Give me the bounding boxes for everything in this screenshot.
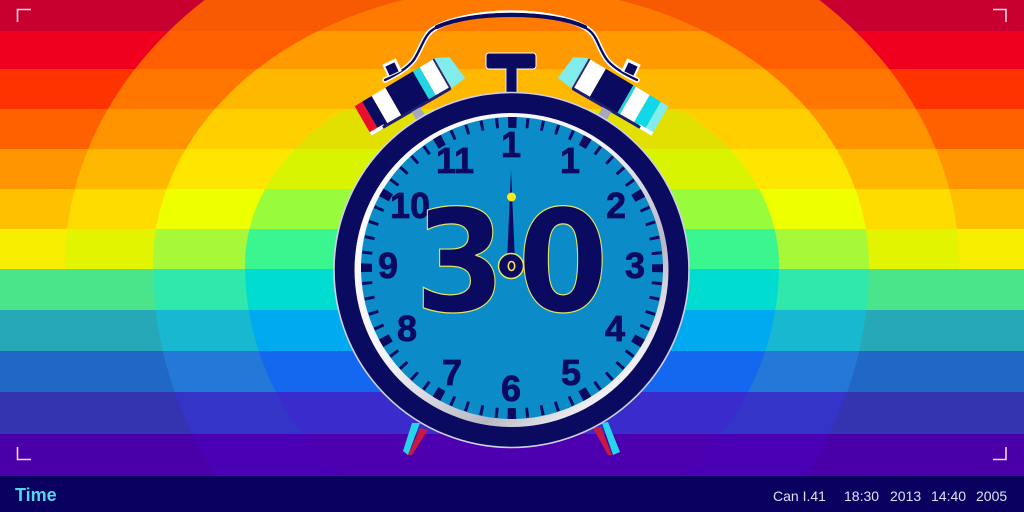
icon: left foot <box>403 423 428 455</box>
status readouts: 14:40 <box>931 488 966 504</box>
corner mark: top left <box>18 10 31 22</box>
status readouts: Can I.41 <box>773 488 826 504</box>
minute ticks <box>366 122 658 414</box>
label: Time: Time <box>15 485 57 505</box>
corner mark: top right <box>993 10 1006 22</box>
center hub <box>498 254 524 278</box>
status readouts: 2013 <box>890 488 921 504</box>
icon: left bell <box>354 57 466 136</box>
clock body outer ring <box>334 92 689 448</box>
clock numerals: 1 <box>560 140 580 181</box>
icon: right bell nub <box>621 58 641 77</box>
icon: right foot <box>593 422 620 455</box>
clock numerals: 7 <box>442 352 462 393</box>
icon: top knob <box>486 53 536 93</box>
clock hand <box>507 170 515 262</box>
corner mark: bottom left <box>18 447 31 460</box>
alarm clock <box>334 13 689 455</box>
icon: left bell mount <box>412 107 425 120</box>
clock face <box>361 117 663 419</box>
bottom bar <box>0 476 1024 512</box>
clock numerals <box>378 124 645 409</box>
icon: left bell nub <box>382 58 402 77</box>
background: inner arc band <box>245 109 779 429</box>
big number 30: 0 <box>518 180 608 345</box>
hour ticks <box>366 122 658 414</box>
big number 30: 3 <box>415 180 505 345</box>
clock numerals: 11 <box>436 140 474 181</box>
clock numerals: 4 <box>605 308 625 349</box>
background: outer arc band <box>65 0 959 269</box>
clock numerals: 5 <box>561 352 581 393</box>
clock numerals: 9 <box>378 245 398 286</box>
clock numerals: 10 <box>390 185 430 226</box>
icon: handle <box>385 13 637 80</box>
clock numerals: 3 <box>625 245 645 286</box>
status readouts: 2005 <box>976 488 1007 504</box>
status readouts <box>773 488 1007 504</box>
big number 30 <box>415 180 608 345</box>
hand yellow dot <box>507 192 516 202</box>
status readouts: 18:30 <box>844 488 879 504</box>
clock numerals: 8 <box>397 308 417 349</box>
background: middle arc band <box>153 0 869 476</box>
icon: right bell <box>558 57 668 136</box>
icon: right bell mount <box>598 107 611 120</box>
silver inner ring <box>354 113 668 427</box>
clock numerals: 2 <box>606 185 626 226</box>
clock numerals: 6 <box>501 368 521 409</box>
corner mark: bottom right <box>993 447 1006 460</box>
clock numerals: 1 <box>501 124 521 165</box>
